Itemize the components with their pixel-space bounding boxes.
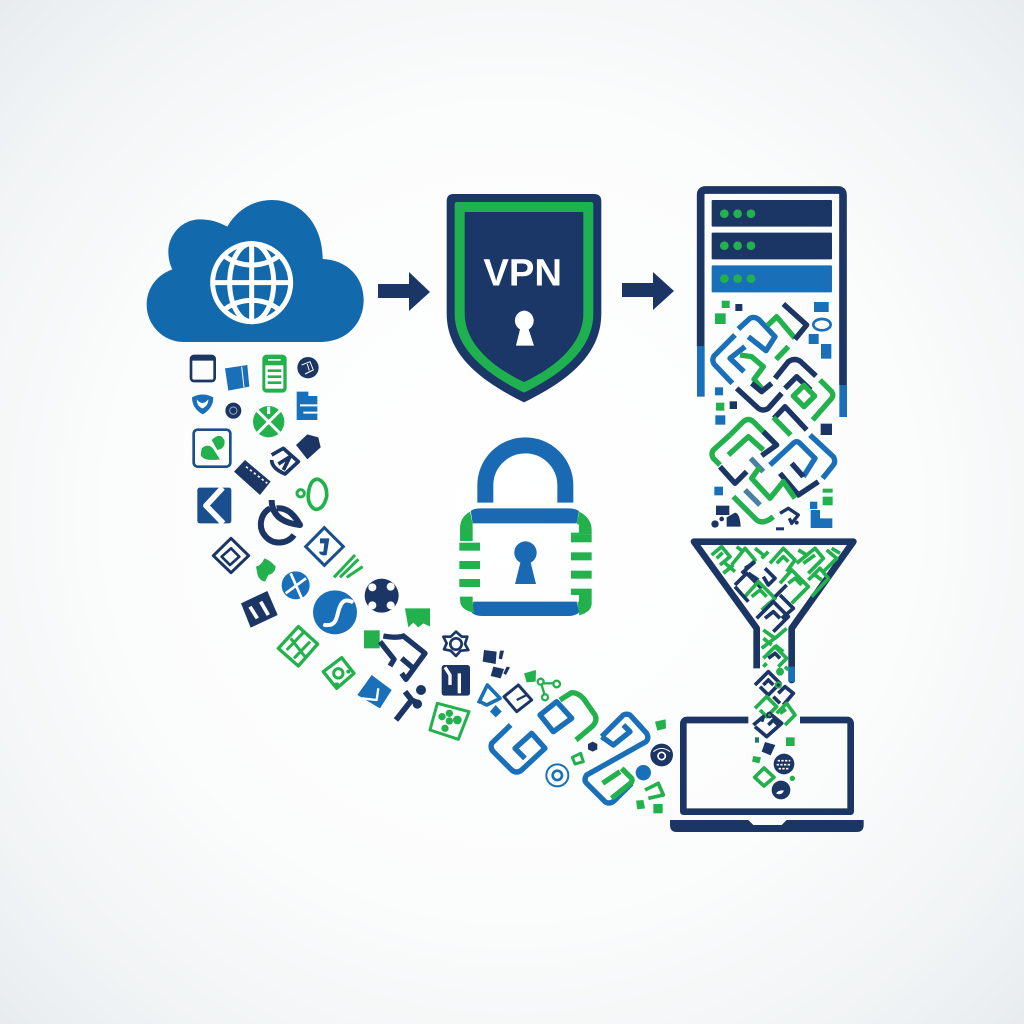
icon: blue cross circle bbox=[282, 571, 310, 599]
shield keyhole bbox=[515, 311, 534, 346]
icon: file blue bbox=[297, 392, 317, 420]
icon: flying blocks bbox=[483, 650, 510, 678]
icon: window bbox=[191, 355, 215, 381]
icon: framed green blob bbox=[194, 430, 230, 467]
icon: VPN shield bbox=[447, 194, 601, 402]
data particles around server bbox=[711, 301, 833, 530]
tangled data chain inside server bbox=[711, 301, 835, 530]
icon: funnel bbox=[694, 542, 853, 682]
link chain: blue G bbox=[491, 725, 545, 772]
arrow: cloud to VPN bbox=[378, 272, 430, 311]
icon: green fan tile bbox=[430, 703, 469, 739]
icon: Y connector bbox=[396, 685, 426, 720]
icon: keyboard bar bbox=[234, 460, 271, 495]
server bar 2 bbox=[712, 233, 832, 259]
icon: blue folder bbox=[357, 675, 392, 708]
icon: clock square bbox=[504, 685, 532, 712]
icon: network dot bbox=[297, 357, 319, 378]
icon: green grid bbox=[278, 627, 318, 666]
icon: green node graph bbox=[524, 670, 560, 700]
icon: refresh loop bbox=[272, 448, 298, 474]
padlock keyhole bbox=[514, 541, 537, 584]
icon: book bbox=[225, 365, 249, 391]
icon: blue link pair bbox=[478, 685, 502, 717]
icon swarm: lower stream of icons toward laptop bbox=[357, 632, 673, 813]
link chain: long blue loop bbox=[585, 714, 648, 803]
server bar 1 bbox=[712, 200, 832, 227]
icon: diamond frame bbox=[213, 538, 249, 573]
shield label: VPN bbox=[483, 253, 562, 295]
icon: four-dot circle bbox=[365, 579, 399, 613]
icon: music diamond bbox=[306, 528, 343, 565]
icon: big S circle bbox=[313, 590, 357, 634]
icon: cloud with globe bbox=[147, 200, 364, 342]
icon: green stripes bbox=[334, 555, 363, 577]
icon: green cross circle bbox=[253, 406, 284, 437]
icon: bag bbox=[296, 434, 321, 459]
icon: chevron tile bbox=[197, 488, 231, 523]
arrow: VPN to server bbox=[622, 272, 674, 310]
icon: green loop bbox=[297, 479, 327, 509]
link chain: blue and green square bbox=[540, 693, 596, 740]
icon: green blob bbox=[256, 558, 276, 582]
icon: server rack bbox=[697, 190, 847, 417]
data stream entering laptop bbox=[753, 672, 795, 737]
icon: green banner bbox=[405, 608, 430, 627]
icon: navy tile bbox=[442, 665, 470, 696]
icon: tilted navy tile bbox=[241, 591, 278, 628]
icon: gear bbox=[443, 632, 468, 656]
icon: padlock bbox=[459, 445, 592, 616]
icon: crescent swirl bbox=[261, 500, 300, 543]
icon: target bbox=[225, 403, 241, 419]
compressed data maze in funnel bbox=[712, 547, 840, 676]
icon: green camera bbox=[323, 658, 354, 688]
icon: laptop bbox=[670, 672, 864, 832]
icon swarm: left curved stream of app icons bbox=[191, 355, 430, 688]
icon: document green bbox=[262, 355, 287, 393]
particles and small icons near laptop bbox=[546, 719, 673, 813]
icon: small shield bbox=[192, 394, 213, 414]
server bar 3 bbox=[712, 265, 832, 292]
icon: square and bent arrow bbox=[364, 630, 425, 679]
